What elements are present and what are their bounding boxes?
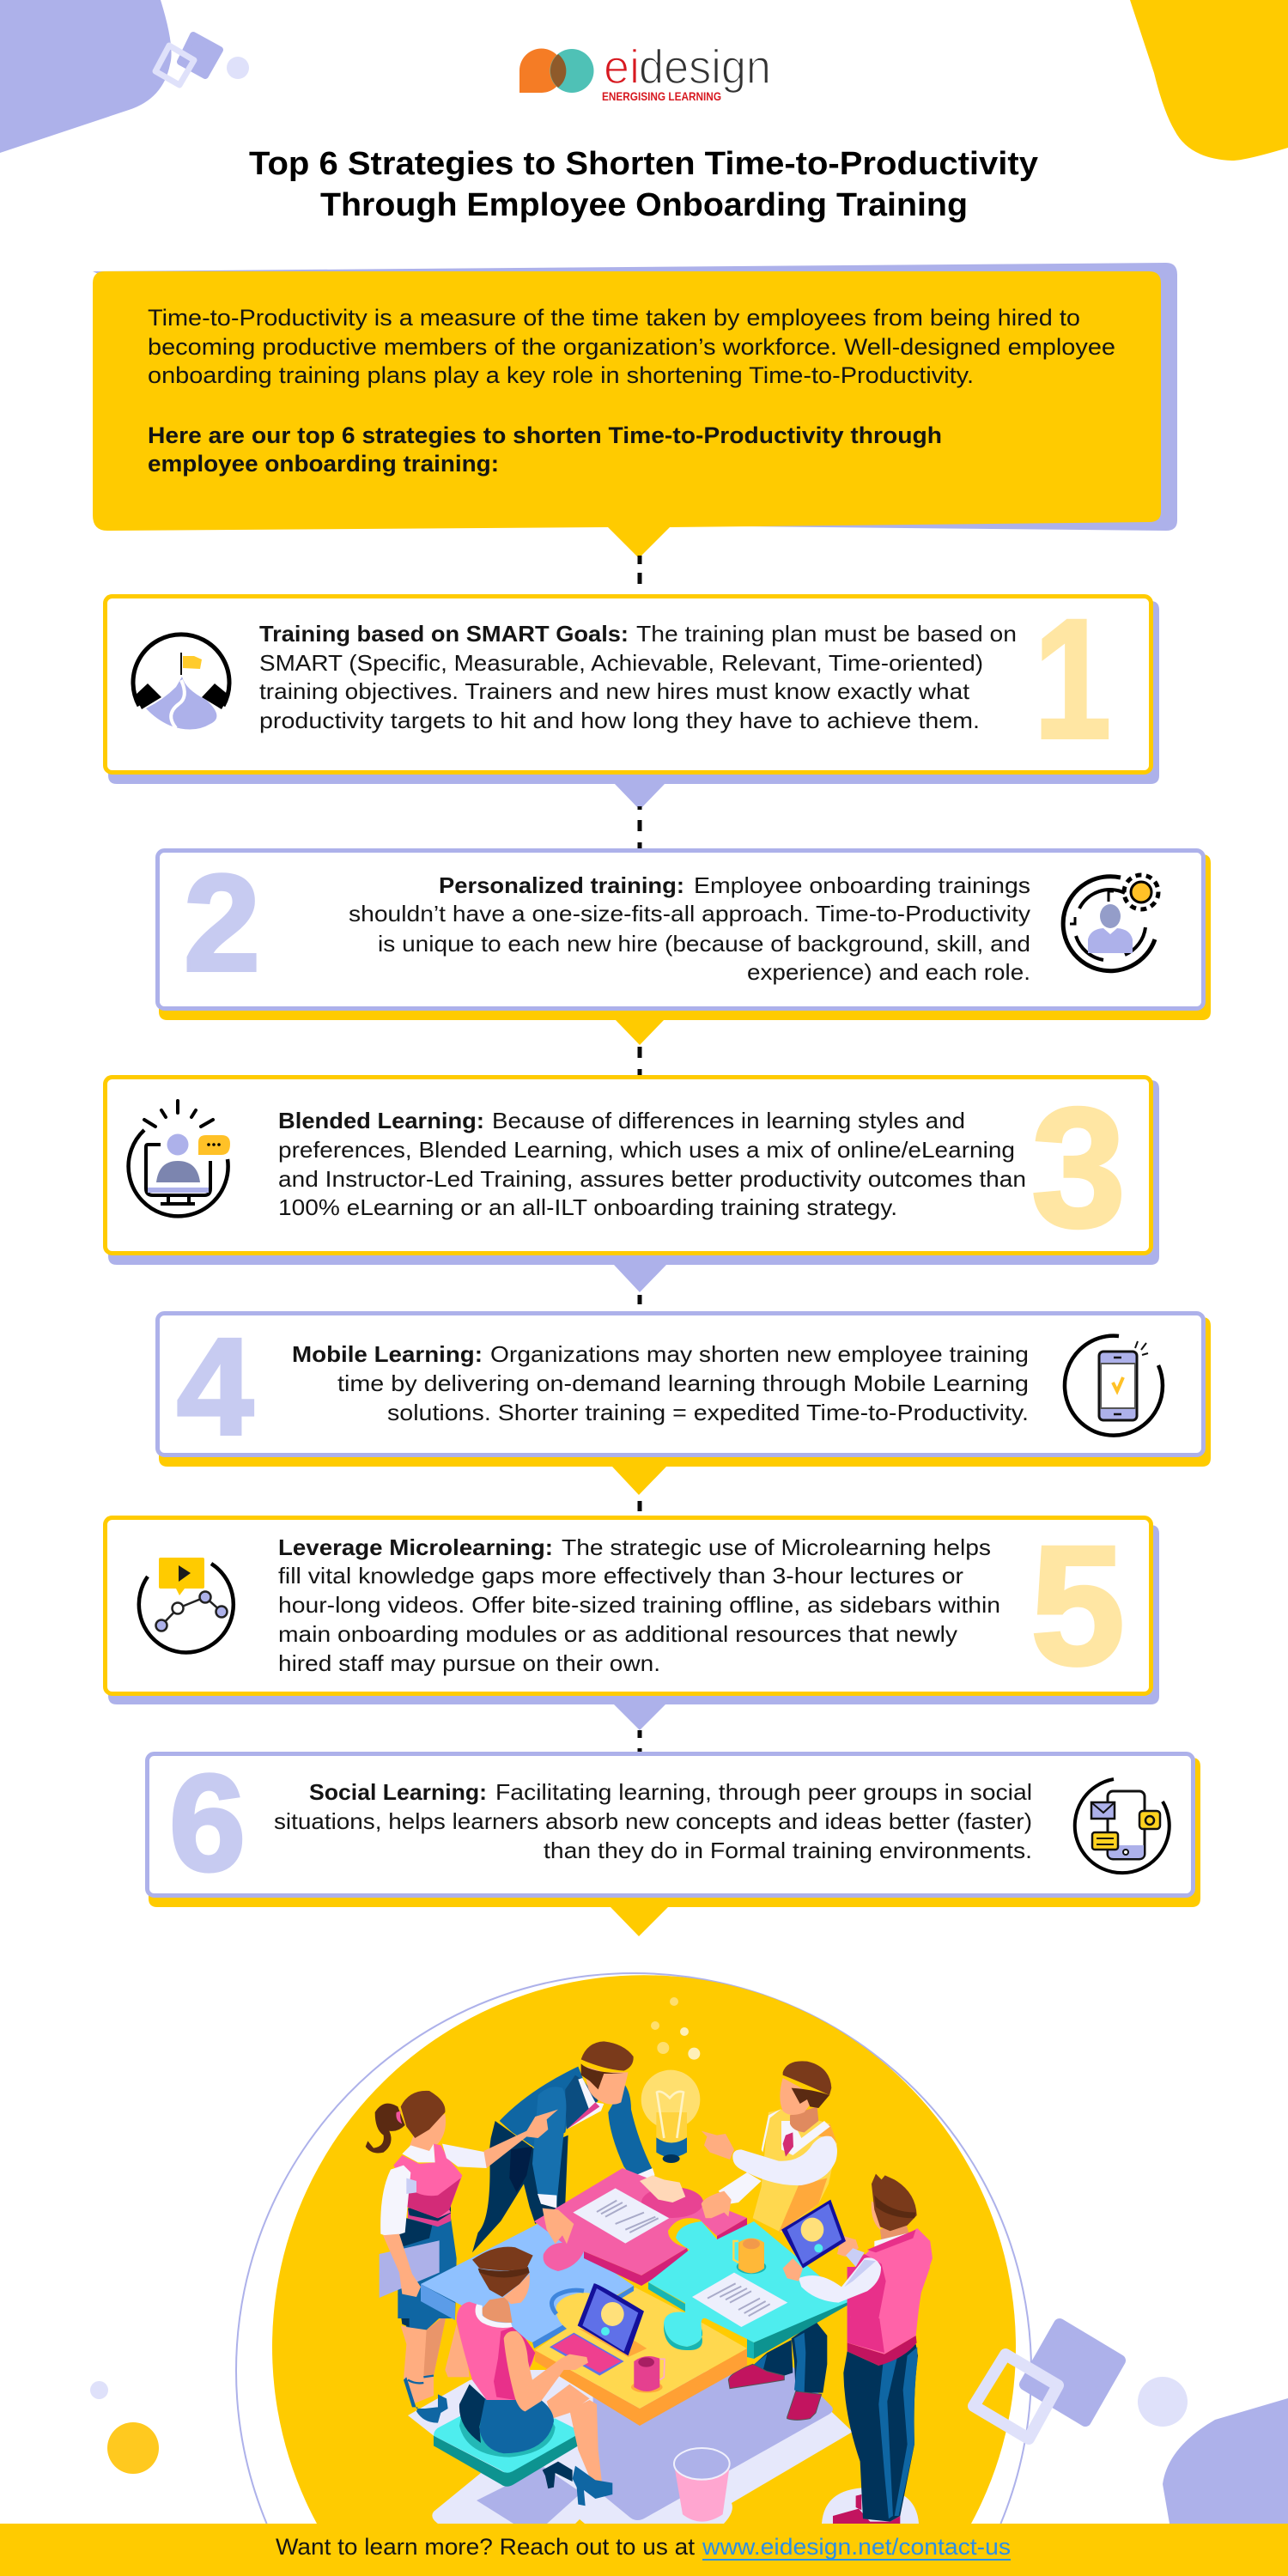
text: mobile learning: Organizations may shorten new employee training xyxy=(490,1341,1029,1367)
text: leverage microlearning: The strategic use of Microlearning helps xyxy=(562,1534,991,1560)
icon: smartphone with check xyxy=(1065,1336,1163,1436)
icon: mountain goal flag xyxy=(133,635,229,730)
text: social learning: than they do in Formal training environments. xyxy=(544,1838,1032,1863)
icon: person target with gear xyxy=(1063,875,1158,971)
text: personalized training: Personalized training: xyxy=(439,872,684,898)
text: leverage microlearning xyxy=(278,1534,1000,1676)
text: personalized training: shouldn’t have a one-size-fits-all approach. Time-to-Productivity xyxy=(349,901,1030,927)
text: social learning: situations, helps learners absorb new concepts and ideas better (faster) xyxy=(274,1808,1032,1834)
floor xyxy=(408,2361,919,2524)
title: Through Employee Onboarding Training xyxy=(320,187,968,223)
person: standing woman xyxy=(366,2091,558,2423)
table items: papers, mugs and laptop xyxy=(550,2188,787,2393)
text: SMART goals: productivity targets to hit and how long they have to achieve them. xyxy=(259,708,980,733)
illustration: team solving puzzle xyxy=(366,1997,933,2524)
waste cup xyxy=(674,2448,730,2522)
puzzle table xyxy=(421,2168,850,2426)
person: man in yellow vest xyxy=(702,2061,837,2420)
text: leverage microlearning: fill vital knowledge gaps more effectively than 3-hour lectures or xyxy=(278,1563,963,1589)
text: blended learning: 100% eLearning or an all-ILT onboarding training strategy. xyxy=(278,1194,897,1220)
connector dashes xyxy=(637,556,642,1752)
panel: strategy 3 xyxy=(105,1072,1159,1292)
text: social learning: Social Learning: xyxy=(309,1779,487,1805)
logo: ENERGISING LEARNING xyxy=(602,89,721,103)
text: mobile learning: Mobile Learning: xyxy=(292,1341,483,1367)
panel: strategy 6 xyxy=(148,1746,1200,1936)
number 3: 3 xyxy=(1031,1072,1126,1262)
light bulb idea xyxy=(641,1997,700,2163)
text: blended learning: preferences, Blended Learning, which uses a mix of online/eLearning xyxy=(278,1137,1015,1163)
text: SMART goals: The training plan must be based on xyxy=(636,621,1017,647)
number 2: 2 xyxy=(184,846,260,999)
logo: design xyxy=(639,39,771,94)
text: personalized training: Employee onboarding trainings xyxy=(694,872,1030,898)
panel: intro: Here are our top 6 strategies to shorten Time-to-Productivity through xyxy=(148,422,942,448)
decoration: left dots xyxy=(90,2381,159,2474)
footer bar xyxy=(0,2524,1288,2576)
text: leverage microlearning: hired staff may pursue on their own. xyxy=(278,1650,660,1676)
decoration: background circles xyxy=(236,1973,1031,2524)
panel: strategy 2 xyxy=(158,846,1211,1045)
hands on table xyxy=(543,2175,732,2244)
text: personalized training: experience) and each role. xyxy=(747,959,1030,985)
decoration: bottom-right diamond and ring xyxy=(974,2324,1188,2439)
number 1: 1 xyxy=(1034,584,1111,774)
text: leverage microlearning: hour-long videos. Offer bite-sized training offline, as sidebars within xyxy=(278,1592,1000,1618)
decoration: top-right shape xyxy=(1130,0,1288,161)
person: man in blue suit xyxy=(472,2041,655,2252)
icon: microlearning video path xyxy=(139,1558,234,1652)
text: mobile learning: time by delivering on-demand learning through Mobile Learning xyxy=(337,1370,1029,1396)
person: man in pink vest with tablet xyxy=(781,2174,933,2524)
footer bar: www.eidesign.net/contact-us xyxy=(702,2534,1011,2560)
text: blended learning xyxy=(278,1108,1026,1220)
decoration: bottom-right blob xyxy=(1163,2398,1288,2524)
text: social learning xyxy=(274,1779,1032,1863)
number 6: 6 xyxy=(169,1746,246,1899)
number 5: 5 xyxy=(1030,1510,1125,1700)
title xyxy=(249,146,1038,223)
text: SMART goals: Training based on SMART Goals: xyxy=(259,621,629,647)
panel: intro: employee onboarding training: xyxy=(148,451,499,477)
footer bar: Want to learn more? Reach out to us at xyxy=(276,2534,696,2560)
title: Top 6 Strategies to Shorten Time-to-Productivity xyxy=(249,146,1038,182)
person: seated woman xyxy=(434,2247,612,2506)
icon: phone with social apps xyxy=(1075,1779,1170,1873)
decoration: top-left shapes xyxy=(0,0,249,153)
text: blended learning: Blended Learning: xyxy=(278,1108,484,1133)
icon: online instructor monitor xyxy=(129,1101,230,1216)
panel: intro: becoming productive members of the organization’s workforce. Well-designed employee xyxy=(148,334,1115,360)
text: personalized training xyxy=(349,872,1030,985)
text: mobile learning xyxy=(292,1341,1029,1425)
text: personalized training: is unique to each new hire (because of background, skill, and xyxy=(378,931,1030,957)
text: SMART goals: training objectives. Trainers and new hires must know exactly what xyxy=(259,678,970,704)
text: leverage microlearning: main onboarding modules or as additional resources that newly xyxy=(278,1621,957,1647)
text: SMART goals: SMART (Specific, Measurable, Achievable, Relevant, Time-oriented) xyxy=(259,650,983,676)
panel: intro xyxy=(93,263,1177,558)
logo: ei xyxy=(604,39,640,94)
panel: strategy 4 xyxy=(158,1309,1211,1495)
text: mobile learning: solutions. Shorter training = expedited Time-to-Productivity. xyxy=(387,1400,1029,1425)
text: social learning: Facilitating learning, through peer groups in social xyxy=(495,1779,1032,1805)
text: blended learning: and Instructor-Led Training, assures better productivity outcomes than xyxy=(278,1166,1026,1192)
text: leverage microlearning: Leverage Microlearning: xyxy=(278,1534,553,1560)
number 4: 4 xyxy=(177,1309,253,1463)
panel: intro: Time-to-Productivity is a measure of the time taken by employees from being hired to xyxy=(148,305,1080,331)
text: blended learning: Because of differences in learning styles and xyxy=(492,1108,965,1133)
logo xyxy=(519,39,771,103)
panel: strategy 1 xyxy=(105,584,1159,810)
panel: intro: onboarding training plans play a key role in shortening Time-to-Productivity. xyxy=(148,362,974,388)
panel: strategy 5 xyxy=(105,1510,1159,1730)
text: SMART goals xyxy=(259,621,1017,733)
